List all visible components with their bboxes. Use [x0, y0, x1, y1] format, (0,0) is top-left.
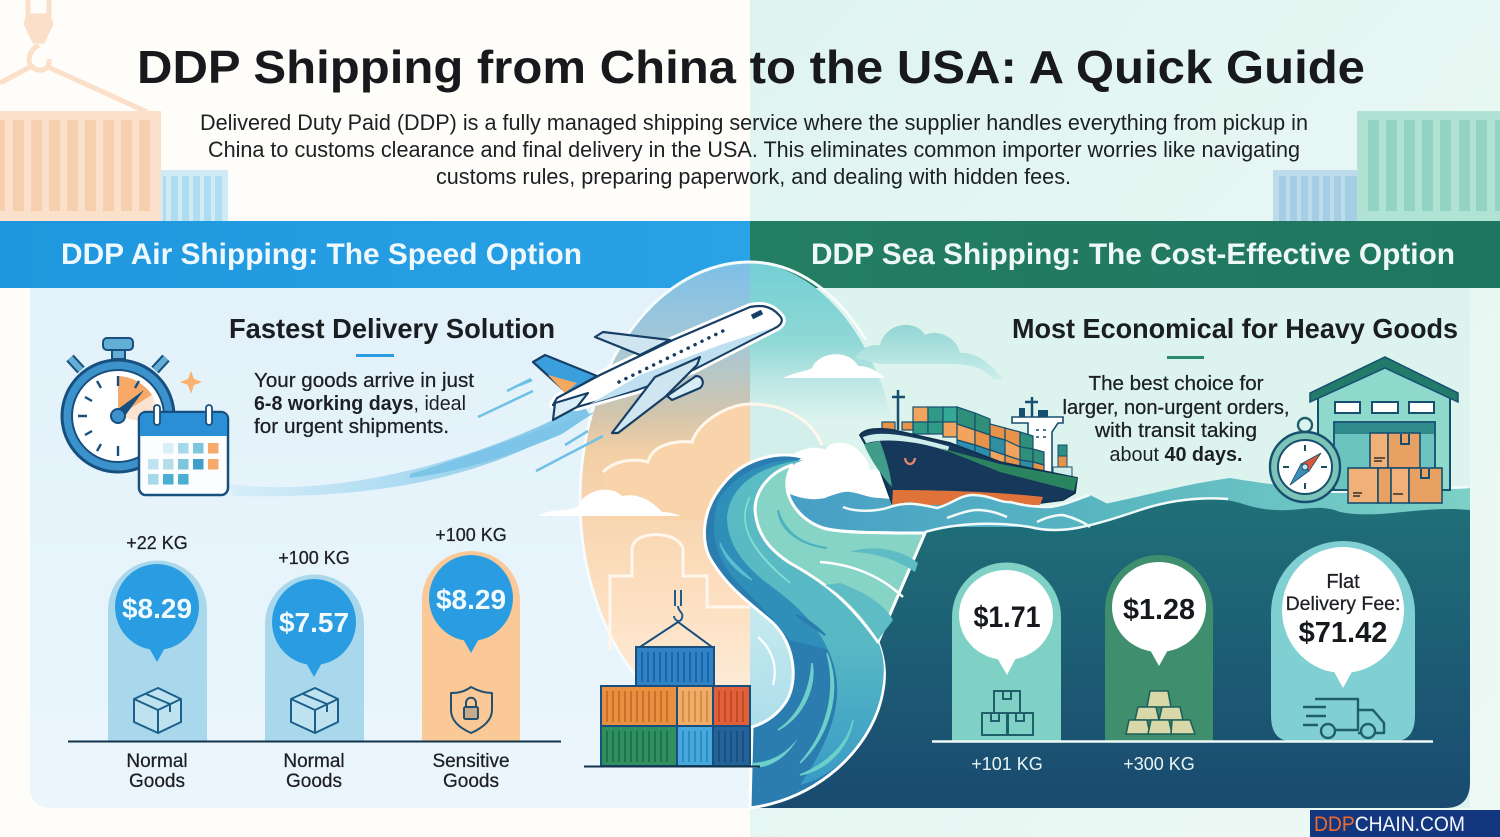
building outline [610, 534, 750, 650]
crane hook [0, 0, 147, 112]
text: sea description: larger, non-urgent orders, [1062, 397, 1290, 419]
peach cloud outline [603, 406, 750, 520]
tailplane [553, 393, 588, 420]
bar: sensitive goods: +100 KG [435, 525, 507, 545]
heading: most economical: Most Economical for Heavy Goods [1012, 313, 1458, 344]
watermark: DDPCHAIN.COM [1314, 813, 1465, 836]
text: air description: for urgent shipments. [254, 416, 449, 438]
bar: normal goods 22kg: $8.29 [122, 593, 192, 624]
sparkle [180, 371, 202, 394]
bar: 300 kg: +300 KG [1123, 754, 1195, 774]
water over hull [850, 495, 1110, 527]
title: DDP Shipping from China to the USA: A Quick Guide [137, 41, 1365, 93]
bar: 300 kg: $1.28 [1123, 594, 1195, 626]
bar: normal goods 100kg: Goods [286, 771, 342, 792]
bar: 101 kg [952, 562, 1061, 774]
chart: air rates [68, 525, 561, 792]
bar: sensitive goods: $8.29 [436, 584, 506, 615]
left header bar: DDP Air Shipping: The Speed Option [61, 238, 582, 271]
baseline [68, 740, 561, 742]
bar: normal goods 100kg: $7.57 [279, 607, 349, 638]
chart: sea rates [932, 541, 1433, 774]
containers [882, 407, 1044, 477]
engine [667, 376, 703, 400]
panel: air shipping background [30, 288, 750, 808]
bar: normal goods 100kg: Normal [283, 751, 345, 772]
wave streaks [745, 497, 790, 583]
text: sea description [1062, 373, 1290, 466]
bar: normal goods 22kg: Goods [129, 771, 185, 792]
masts [892, 390, 1038, 430]
bar: sensitive goods: Sensitive [432, 751, 510, 772]
icon: calendar [139, 405, 228, 495]
baseline [932, 740, 1433, 743]
teal cloud right [855, 325, 1003, 380]
central globe sky [538, 262, 1003, 738]
background containers right [1273, 111, 1500, 221]
anchor mark [905, 458, 915, 464]
bar: sensitive goods [422, 525, 520, 792]
wave body [704, 455, 925, 808]
right header bar [750, 221, 1500, 288]
heading: fastest delivery [229, 313, 555, 357]
bar: flat fee: Delivery Fee: [1286, 593, 1400, 615]
bow trim [862, 433, 950, 452]
lower wing [612, 357, 700, 433]
bar: flat fee: Flat [1326, 571, 1360, 593]
bar: 101 kg: +101 KG [971, 754, 1043, 774]
trail of plane [230, 379, 603, 496]
rear containers [1058, 445, 1067, 456]
text: sea description: The best choice for [1088, 373, 1264, 395]
orange keel [892, 490, 1043, 505]
intro paragraph [200, 110, 1308, 189]
tail fin [533, 355, 597, 393]
green stripe [940, 448, 1077, 491]
icon: stopwatch [62, 338, 202, 472]
intro paragraph: China to customs clearance and final delivery in the USA. This eliminates common importer worries like navigating [208, 137, 1300, 162]
white cloud left [538, 490, 680, 516]
intro paragraph: customs rules, preparing paperwork, and dealing with hidden fees. [436, 164, 1071, 189]
heading: fastest delivery: Fastest Delivery Solution [229, 313, 555, 344]
halo [553, 306, 782, 407]
bar: normal goods 22kg [108, 533, 207, 792]
heading: most economical [1012, 313, 1458, 359]
text: air description: Your goods arrive in just [254, 370, 474, 392]
wave foam lines [843, 487, 1468, 532]
upper outer band [714, 460, 830, 650]
bridge tower [1012, 417, 1063, 473]
icon: warehouse [1310, 357, 1458, 503]
fuselage [553, 306, 782, 407]
hull [860, 429, 1077, 503]
cockpit window [752, 312, 762, 317]
bar: flat fee [1271, 541, 1415, 741]
bar: normal goods 100kg: +100 KG [278, 548, 350, 568]
intro paragraph: Delivered Duty Paid (DDP) is a fully managed shipping service where the supplier handles everything from pickup in [200, 110, 1308, 135]
white cloud behind wave [785, 443, 900, 500]
pale swirl centre [750, 600, 810, 735]
bar: normal goods 22kg: Normal [126, 751, 188, 772]
ribbon [727, 460, 884, 785]
icon: compass [1270, 418, 1340, 502]
panel: sea shipping background [750, 288, 1470, 808]
deep sea panel [760, 498, 1470, 808]
right header bar: DDP Sea Shipping: The Cost-Effective Option [811, 238, 1455, 271]
text: air description [254, 370, 474, 438]
icon: container stack [584, 590, 760, 766]
flap [755, 465, 925, 642]
background containers left [0, 0, 228, 221]
text: sea description: with transit taking [1094, 420, 1257, 442]
cardboard boxes [1348, 433, 1442, 503]
text: sea description: about 40 days. [1110, 444, 1242, 466]
upper wing [595, 332, 670, 355]
water band [790, 478, 1470, 540]
great wave [704, 455, 925, 808]
bar: 300 kg [1105, 555, 1213, 774]
funnel [1019, 408, 1048, 417]
left header bar [0, 221, 750, 288]
bar: normal goods 22kg: +22 KG [126, 533, 188, 553]
bar: flat fee: $71.42 [1299, 617, 1387, 649]
bar: normal goods 100kg [265, 548, 364, 792]
text: air description: 6-8 working days, ideal [254, 393, 466, 415]
bar: sensitive goods: Goods [443, 771, 499, 792]
icon: airplane [533, 306, 782, 433]
icon: container ship [850, 390, 1110, 527]
white cloud right [783, 354, 885, 378]
bar: 101 kg: $1.71 [974, 601, 1040, 634]
